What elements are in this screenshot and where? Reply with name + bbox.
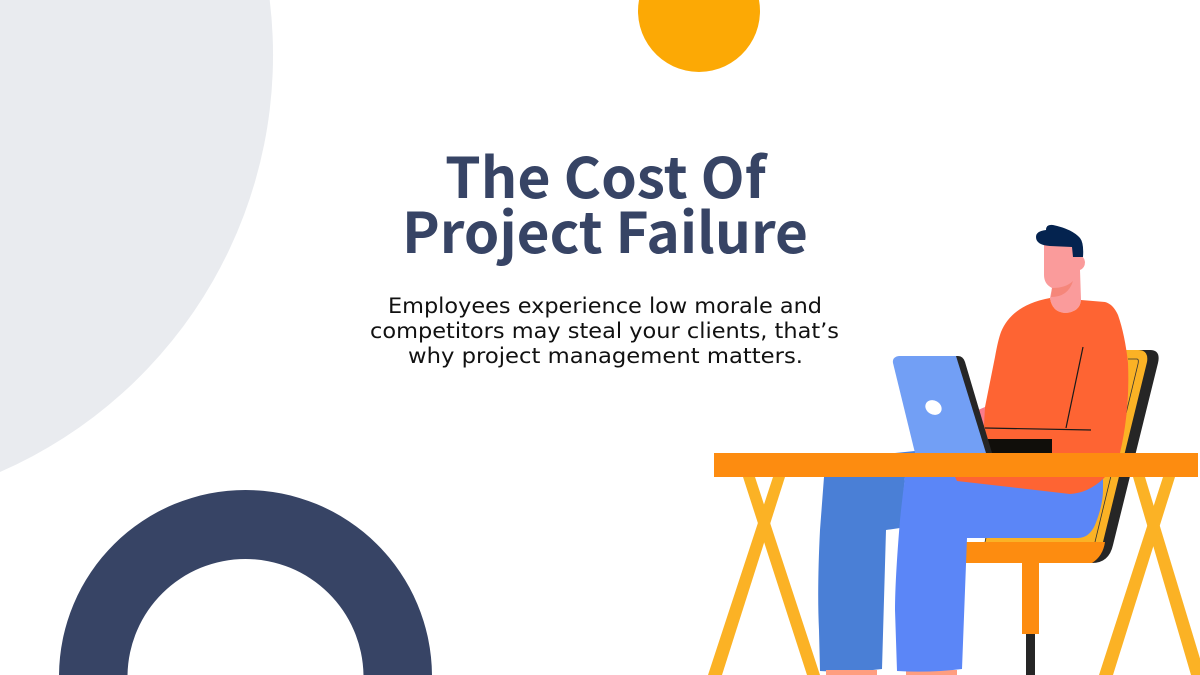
desk legs right — [1099, 477, 1200, 675]
laptop screen — [893, 356, 986, 453]
shirt arm lines — [985, 347, 1091, 430]
background ring: navy — [59, 490, 432, 675]
subtitle text — [370, 294, 839, 368]
laptop logo — [923, 397, 944, 418]
feet — [826, 670, 957, 675]
subtitle text: Employees experience low morale and — [388, 294, 822, 318]
illustration: person working at desk — [708, 225, 1200, 675]
laptop lid edge — [955, 356, 992, 453]
subtitle text: why project management matters. — [408, 344, 803, 368]
front leg — [895, 477, 1103, 672]
chair inner line — [985, 359, 1138, 542]
hand behind laptop — [978, 407, 985, 425]
background circle: amber — [638, 0, 760, 72]
chair seat — [966, 542, 1105, 563]
shirt — [977, 298, 1128, 453]
neck shadow — [1051, 281, 1073, 297]
back leg — [818, 477, 905, 672]
background circle: grey — [0, 0, 273, 472]
chair post — [1022, 563, 1039, 634]
neck and face — [1044, 245, 1085, 313]
desk legs left — [708, 477, 820, 675]
chair back shell — [1060, 350, 1159, 563]
keyboard black block — [988, 439, 1052, 453]
subtitle text: competitors may steal your clients, that’s — [370, 319, 839, 343]
chair base stem — [1026, 634, 1035, 675]
hair — [1036, 225, 1083, 257]
forearm sliver — [895, 451, 915, 453]
shirt lower edge — [955, 477, 1105, 494]
chair back cushion — [985, 350, 1147, 542]
chair — [966, 350, 1159, 675]
desk top — [714, 453, 1198, 477]
title — [402, 134, 808, 270]
title: Project Failure — [402, 189, 808, 270]
title: The Cost Of — [445, 134, 768, 215]
